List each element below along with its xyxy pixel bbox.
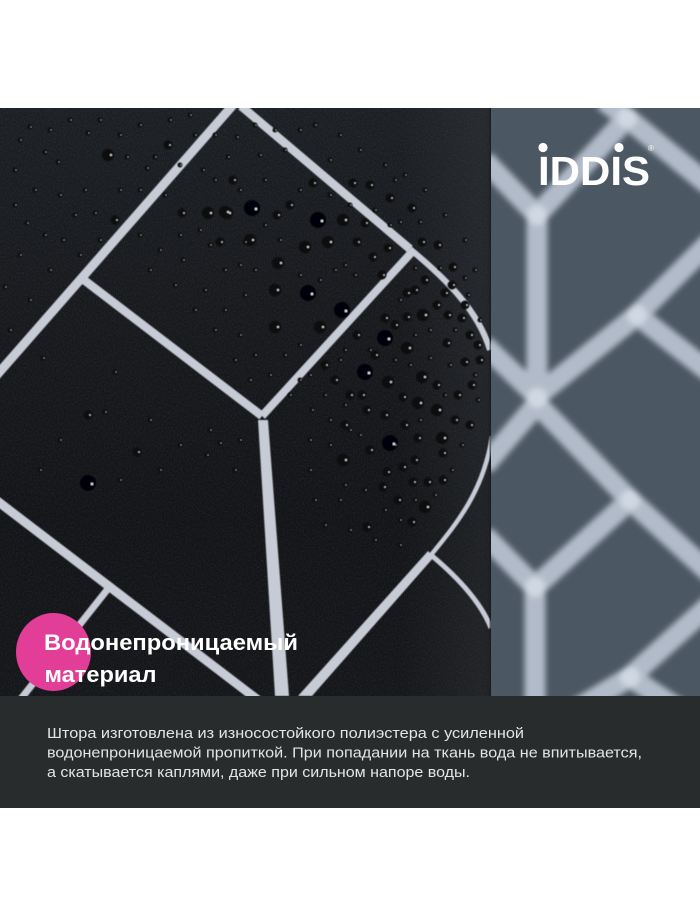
white geometric lines on fabric — [0, 105, 492, 700]
panel: wet dark fabric — [0, 105, 492, 700]
caption text: водонепроницаемой пропиткой. При попадании на ткань вода не впитывается, — [47, 744, 642, 762]
panel: caption background — [0, 696, 700, 808]
heading: Водонепроницаемый — [44, 630, 298, 655]
fabric edge shadow — [490, 108, 491, 696]
icon: pink circle accent — [16, 613, 91, 691]
infographic — [0, 108, 700, 808]
logo: IDDIS: IDDIS — [538, 148, 650, 194]
logo: IDDIS: ® — [648, 144, 654, 153]
water droplets — [5, 115, 482, 545]
caption text: а скатывается каплями, даже при сильном напоре воды. — [47, 764, 470, 781]
caption text: Штора изготовлена из износостойкого полиэстера с усиленной — [47, 725, 524, 742]
heading — [44, 630, 298, 687]
heading: материал — [44, 662, 156, 687]
blurred lattice pattern — [484, 100, 700, 710]
panel: blurred curtain background — [484, 100, 700, 710]
caption text — [47, 725, 642, 781]
